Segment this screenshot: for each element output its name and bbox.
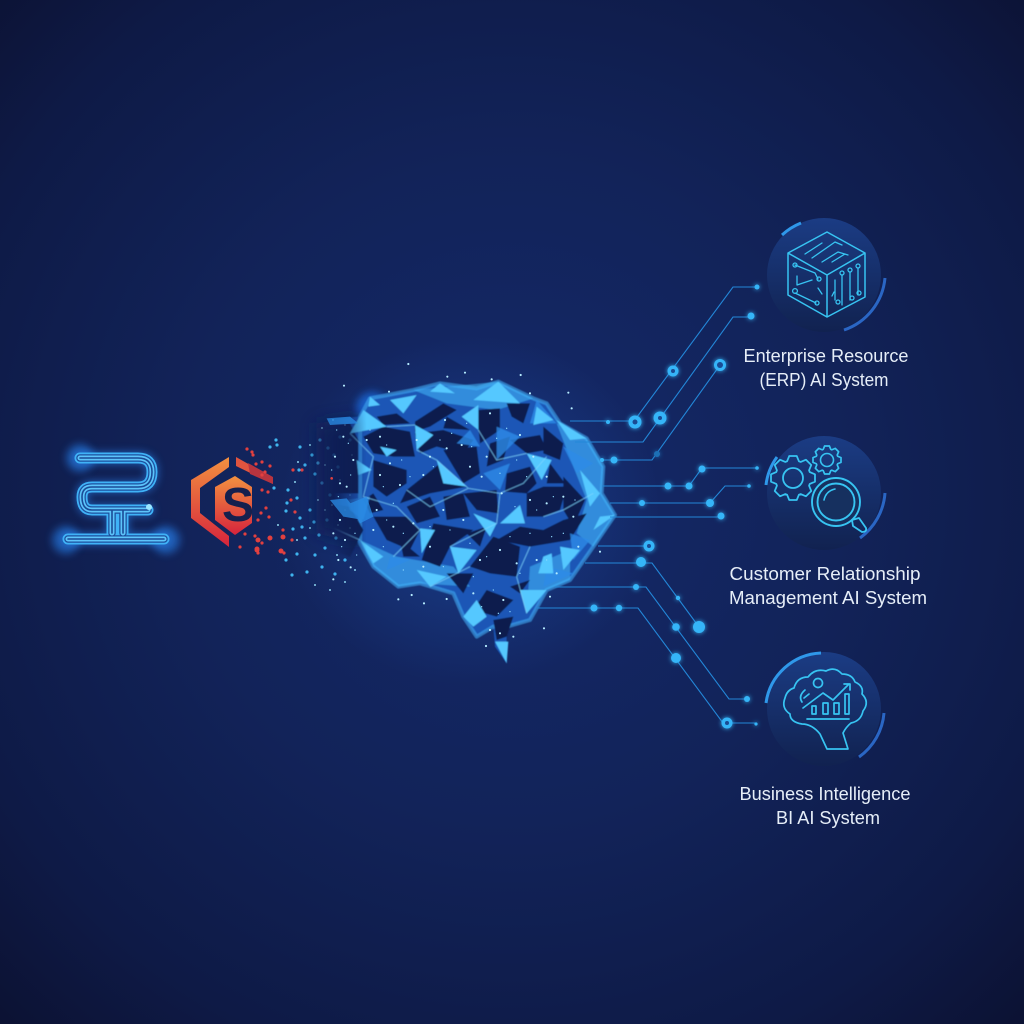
bright zones bbox=[362, 382, 615, 590]
logo: red hexagon S: S bbox=[222, 479, 254, 532]
orbit arcs bbox=[766, 653, 821, 703]
dark facets bbox=[330, 403, 587, 640]
panel: ERP bbox=[744, 218, 908, 390]
brain: low-poly network bbox=[301, 362, 620, 664]
particles: dissolving logo bbox=[240, 420, 355, 590]
logo: red hexagon S bbox=[191, 457, 273, 547]
brain facets bbox=[330, 382, 615, 663]
panel: CRM bbox=[729, 436, 927, 608]
icon: circuit cube bbox=[788, 232, 865, 317]
orbit arcs bbox=[766, 457, 777, 485]
connectors: upper to ERP bbox=[570, 284, 760, 464]
panel: BI bbox=[740, 652, 910, 828]
brain rim bbox=[360, 382, 615, 637]
orbit arc lower bbox=[860, 493, 885, 538]
disc bbox=[767, 652, 881, 766]
icon: gears and magnifier bbox=[771, 446, 866, 532]
label: BI AI System bbox=[776, 808, 880, 828]
left fragments bbox=[327, 417, 373, 523]
label bbox=[744, 346, 908, 390]
disc bbox=[767, 218, 881, 332]
orbit arc lower bbox=[844, 278, 885, 330]
node specks bbox=[333, 364, 600, 646]
label bbox=[729, 564, 927, 608]
orbit arcs bbox=[782, 223, 801, 235]
mesh lines bbox=[330, 425, 593, 613]
label: (ERP) AI System bbox=[760, 370, 888, 390]
icon: circuit glyph bbox=[52, 444, 180, 554]
label: Business Intelligence bbox=[740, 784, 910, 804]
orbit arc lower bbox=[859, 713, 884, 757]
connectors: middle to CRM bbox=[602, 466, 759, 520]
bright facets bbox=[350, 382, 615, 663]
brain body bbox=[330, 382, 615, 663]
label: Customer Relationship bbox=[730, 564, 920, 584]
brain dark core fading left bbox=[317, 417, 360, 543]
label: Enterprise Resource bbox=[744, 346, 908, 366]
connectors: lower to BI bbox=[537, 540, 758, 728]
label bbox=[740, 784, 910, 828]
disc bbox=[767, 436, 881, 550]
icon: brain with chart bbox=[784, 669, 866, 749]
label: Management AI System bbox=[729, 588, 927, 608]
mid-blue facets bbox=[347, 400, 593, 587]
